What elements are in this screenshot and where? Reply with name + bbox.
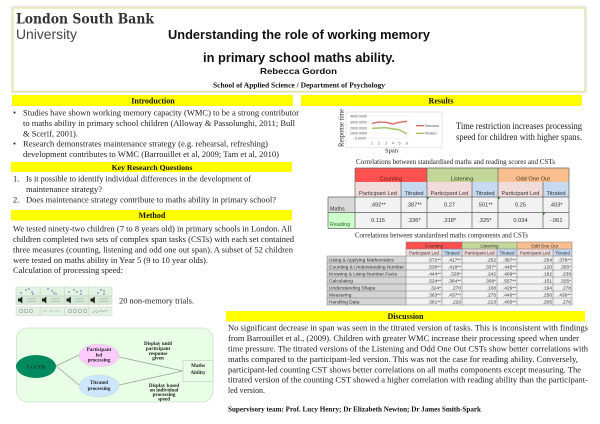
label: display until response [144,341,173,362]
table: maths components correlations: .256 [543,292,552,298]
author: Rebecca Gordon [260,66,337,76]
label: non-memory trials: 20 non-memory trials. [119,296,194,306]
table: maths components correlations: .213 [487,300,496,306]
heading: key research questions [11,162,292,172]
text block: method description: were tested on maths ability in Year 5 (9 to 10 year olds). [13,255,208,265]
table: maths components correlations: .445** [503,264,516,270]
table: reading and maths correlations: Titrated [404,191,424,197]
text block: introduction bullets: Studies have shown working memory capacity (WMC) to be a strong contributor [23,108,299,118]
node: titrated processing: processing [88,386,111,392]
table: maths components correlations: Participant Led [464,250,495,256]
table: reading and maths correlations: Titrated [475,191,495,197]
title: Understanding the role of working memory [168,28,430,42]
table: maths components correlations: Counting [425,244,444,248]
table: maths components correlations: .429** [503,286,516,292]
text block: method description [13,224,295,275]
label: display based on speed: on individual [150,388,179,394]
text block: chart finding [456,122,582,143]
heading: introduction [12,95,293,106]
panel: method [11,210,295,316]
panel: discussion [226,311,589,414]
text block: research questions: 2. [13,194,19,204]
table: maths components correlations: .437** [448,292,461,298]
line chart: response time by span: 4 [392,142,394,146]
table: reading and maths correlations: 0.115 [371,218,385,224]
table: maths components correlations: .275 [487,292,496,298]
text block: discussion: from Barrouillet et al., (2009). Children with greater WMC increase their processing speed when under [228,333,579,343]
table: maths components correlations: .325* [560,278,571,284]
line chart: response time by span: 5 [398,142,400,146]
text block: discussion: led version. [228,385,265,395]
text block: research questions: 1. [13,174,19,184]
node: participant led processing: processing [88,358,111,364]
title [168,28,430,65]
table: maths components correlations: Participant Led [520,250,551,256]
table: maths components correlations: .418** [448,264,461,270]
table: reading and maths correlations: .387** [406,202,423,208]
node: maths ability: Maths [191,363,205,369]
table: maths components correlations [327,242,572,306]
text block: research questions: Is it possible to identify individual differences in the development of [26,174,251,184]
text block: chart finding: speed for children with higher spans. [456,132,582,143]
text block: chart finding: Time restriction increases processing [456,122,582,132]
text block: method description: three measures (counting, listening and odd one out span). A subset of 52 children [13,244,294,254]
node: titrated processing: Titrated [90,380,108,386]
line chart: response time by span: Titrated [424,132,437,136]
table: maths components correlations: .252 [487,258,496,264]
node: 3 x CSTs: 3 x CSTs [26,364,46,370]
text block: method description: children completed two sets of complex span tasks (CSTs) with each set contained [13,234,295,244]
caption: table 1: Correlations between standardised maths and reading scores and CSTs [356,159,555,166]
panel: results [301,95,582,306]
table: reading and maths correlations: 0.27 [444,202,455,208]
text block: discussion: No significant decrease in span was seen in the titrated version of tasks. This is inconsistent with findings [228,322,588,332]
text block: discussion: time pressure. The titrated versions of the Listening and Odd One Out CSTs show better correlations with [228,344,589,354]
affiliation: School of Applied Science / Department of Psychology [213,82,386,90]
table: maths components correlations: .557** [503,278,516,284]
text block: introduction bullets: Research demonstrates maintenance strategy (e.g. rehearsal, refreshing) [23,138,268,148]
line chart: response time by span: Standard [424,124,439,128]
table: maths components correlations: .337* [485,264,496,270]
table: maths components correlations: .530** [428,264,441,270]
text block: discussion [228,322,589,395]
text block: introduction bullets: • [13,138,16,148]
icon grid: processing speed trials [16,287,112,316]
table: maths components correlations: .361** [428,300,441,306]
line chart: response time by span: Span [385,148,399,154]
table: maths components correlations: Participant Led [409,250,440,256]
line chart: response time by span: 3000.0000 [350,120,367,124]
text block: discussion: titrated version of the counting CST showed a higher correlation with reading ability than the participant- [228,374,588,384]
label: display until response: Display until [144,341,173,347]
node: participant led processing: led [96,352,102,358]
caption: table 2: Correlations between standardised maths components and CSTs [355,232,528,240]
table: reading and maths correlations [328,168,569,228]
node: participant led processing: Participant [87,347,112,353]
text block: introduction bullets [13,108,299,159]
table: maths components correlations: Understanding Shape [329,286,376,292]
table: maths components correlations: Using & Applying Mathematics [329,258,394,264]
table: maths components correlations: .242 [487,272,496,278]
heading: introduction: Introduction [131,96,175,105]
panel: introduction [12,95,299,159]
label: display until response: participant [146,346,170,352]
text block: supervisory team: Supervisory team: Prof. Lucy Henry; Dr Elizabeth Newton; Dr James Smith-Spark [228,406,481,414]
label: display based on speed [149,383,179,402]
line chart: response time by span: 2 [378,142,380,146]
table: maths components correlations: .276 [562,300,571,306]
table: maths components correlations: Calculating [329,278,353,284]
table: reading and maths correlations: Listening [451,176,473,182]
table: maths components correlations: .278 [562,286,571,292]
text block: introduction bullets: development contributes to WMC (Barrouillet et al, 2009; Tam et al, 2010) [23,149,279,159]
heading: discussion: Discussion [387,312,424,321]
table: maths components correlations: .194 [543,286,552,292]
panel: header [12,8,586,92]
table: reading and maths correlations: Maths [330,206,345,212]
table: reading and maths correlations: Participant Led [359,191,397,197]
table: maths components correlations: .364** [448,278,461,284]
table: reading and maths correlations: 0.25 [515,202,526,208]
label: display based on speed: Display based [149,383,179,389]
logo: London South Bank University [16,12,155,42]
table: maths components correlations: Titrated [499,250,515,256]
table: maths components correlations: .363** [428,292,441,298]
table: reading and maths correlations: .403* [549,202,563,208]
node: participant led processing [79,344,119,367]
heading: results [301,95,582,106]
table: maths components correlations: .572** [428,258,441,264]
text block: introduction bullets: to maths ability in primary school children (Alloway & Passolunghi, 2011; Bull [23,118,296,128]
table: maths components correlations: .324* [430,286,441,292]
table: maths components correlations: .328* [450,272,461,278]
table: maths components correlations: .444** [428,272,441,278]
table: maths components correlations: .417** [448,258,461,264]
node: maths ability [183,360,213,382]
table: reading and maths correlations: Reading [330,222,350,228]
logo: London South Bank University: London South Bank [16,12,155,28]
table: maths components correlations: .226 [452,300,461,306]
label: display until response: response [149,351,168,357]
text block: research questions [13,174,276,204]
text block: introduction bullets: • [13,108,16,118]
table: reading and maths correlations: Odd One Out [516,176,550,182]
table: maths components correlations: .254 [543,258,552,264]
table: maths components correlations: Handling Data [329,300,360,306]
table: maths components correlations: .355* [560,264,571,270]
table: maths components correlations: .108 [487,286,496,292]
table: maths components correlations: .397** [503,258,516,264]
panel: key research questions [11,162,292,204]
text block: method description: We tested ninety-two children (7 to 8 years old) in primary schools in London. All [13,224,293,234]
line chart: response time by span: Response time [338,109,346,147]
table: maths components correlations: .446** [503,292,516,298]
table: maths components correlations: Titrated [444,250,460,256]
node: titrated processing [79,375,119,397]
line chart: response time by span: 2000.0000 [350,126,367,130]
table: reading and maths correlations: -.061 [550,218,562,224]
arrows [56,355,183,385]
table: maths components correlations: .182 [543,272,552,278]
line chart: response time by span: 1 [371,142,373,146]
table: maths components correlations: .205 [543,300,552,306]
text block: discussion: maths compared to the participant-led version. This was not the case for reading ability. Conversely, [228,354,578,364]
label: display based on speed: speed [158,396,170,402]
table: maths components correlations: Knowing & Using Number Facts [329,272,398,278]
label: display based on speed: processing [153,392,176,398]
text block: research questions: maintenance strategy? [26,184,102,194]
table: reading and maths correlations: Titrated [546,191,566,197]
flow diagram: processing conditions [16,328,213,402]
table: maths components correlations: .405** [503,300,516,306]
table: reading and maths correlations: .336* [407,218,421,224]
text block: discussion: participant-led counting CST shows better correlations on all maths components except measuring. The [228,364,581,374]
table: maths components correlations: Listening [480,244,499,248]
table: reading and maths correlations: .318* [443,218,457,224]
table: reading and maths correlations: .501** [477,202,494,208]
line chart: response time by span [338,109,442,154]
table: reading and maths correlations: .492** [370,202,387,208]
heading: method: Method [139,211,166,220]
heading: key research questions: Key Research Questions [112,163,192,172]
node: 3 x CSTs [16,355,56,378]
line chart: response time by span: 1000.0000 [350,132,367,136]
text block: method description: Calculation of processing speed: [13,265,123,275]
table: maths components correlations: .270 [452,286,461,292]
table: reading and maths correlations: Participant Led [431,191,468,197]
table: maths components correlations: Odd One Out [531,244,559,248]
table: maths components correlations: .409** [503,272,516,278]
heading: method [11,210,292,220]
line chart: response time by span: 6 [406,142,408,146]
table: maths components correlations: .436** [558,292,571,298]
title: in primary school maths ability. [203,51,395,65]
node: maths ability: Ability [190,370,206,376]
table: reading and maths correlations: 0.034 [513,218,528,224]
table: maths components correlations: .151 [543,278,552,284]
heading: discussion [226,311,585,322]
table: maths components correlations: .524** [428,278,441,284]
table: reading and maths correlations: .325* [478,218,492,224]
table: maths components correlations: Titrated [555,250,571,256]
table: reading and maths correlations: Participant Led [502,191,539,197]
line chart: response time by span: 4000.0000 [350,114,367,118]
text block: research questions: Does maintenance strategy contribute to maths ability in primary school? [26,194,276,204]
table: maths components correlations: .379** [558,258,571,264]
table: maths components correlations: .120 [543,264,552,270]
table: maths components correlations: Counting & Understanding Number [329,264,404,270]
table: maths components correlations: Measuring [329,292,352,298]
heading: results: Results [429,96,453,105]
label: display until response: given [152,356,164,362]
logo: London South Bank University: University [16,27,77,42]
table: maths components correlations: .306* [485,278,496,284]
text block: introduction bullets: & Scerif, 2001). [23,128,78,138]
line chart: response time by span: 3 [385,142,387,146]
table: reading and maths correlations: Counting [380,176,402,182]
table: maths components correlations: .239 [562,272,571,278]
line chart: response time by span: 0.0000 [355,136,366,140]
